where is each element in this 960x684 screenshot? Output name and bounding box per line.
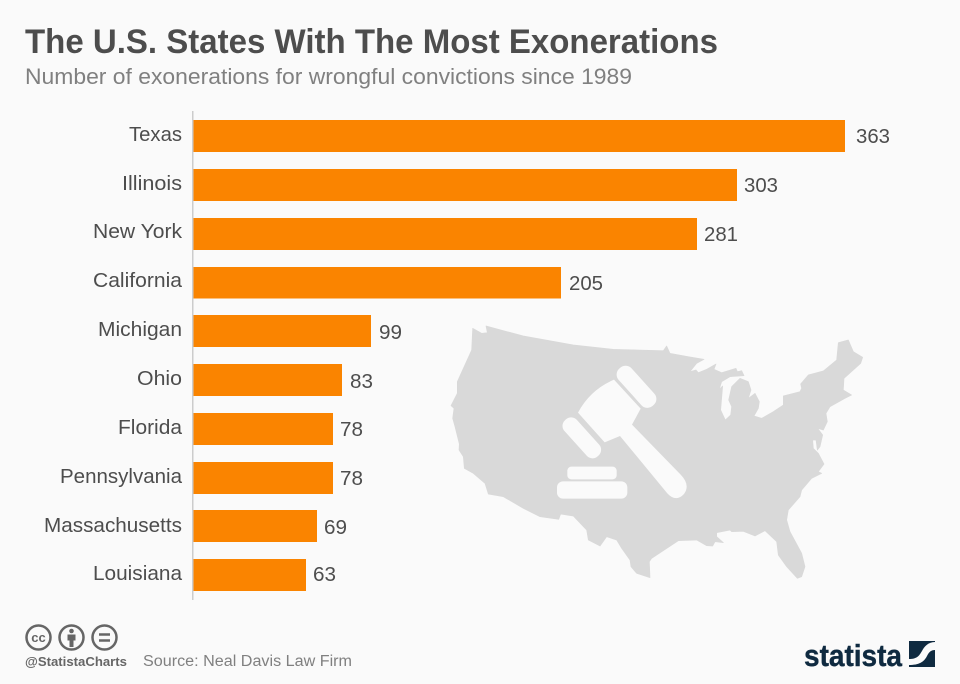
handle: @StatistaCharts: [25, 654, 127, 669]
row: Louisiana: 63: [313, 563, 336, 586]
row: Illinois: [122, 169, 778, 201]
row: Texas: Texas: [129, 123, 182, 146]
row: Florida: 78: [340, 418, 363, 441]
title: The U.S. States With The Most Exonerations: [25, 23, 718, 61]
logo wordmark: statista: [804, 638, 903, 673]
row: Florida: [118, 413, 363, 445]
row: Louisiana: Louisiana: [93, 562, 183, 585]
row: Louisiana: [93, 559, 336, 591]
statista logo: [804, 638, 935, 673]
creative commons icons: [26, 626, 116, 650]
icon: no derivatives: [92, 626, 116, 650]
icon: U.S. map: [451, 326, 863, 578]
row: Ohio: [137, 364, 373, 396]
row: Pennsylvania: [60, 462, 363, 494]
row: Massachusetts: Massachusetts: [44, 514, 182, 537]
row: Ohio: Ohio: [137, 367, 182, 390]
row: Illinois: Illinois: [122, 172, 182, 195]
icon: cc: cc: [31, 630, 46, 645]
row: Massachusetts: [44, 510, 347, 542]
logo mark: [909, 641, 935, 667]
row: Pennsylvania: 78: [340, 467, 363, 490]
bar chart: [44, 111, 890, 600]
map of the United States with gavel icon: [451, 326, 863, 578]
row: Michigan: [98, 315, 402, 347]
row: New York: New York: [93, 220, 183, 243]
axis line: [192, 111, 194, 600]
icon: gavel: [557, 362, 687, 499]
row: Texas: 363: [856, 125, 890, 148]
row: Florida: Florida: [118, 416, 183, 439]
row: Pennsylvania: Pennsylvania: [60, 465, 183, 488]
row: California: 205: [569, 272, 603, 295]
subtitle: Number of exonerations for wrongful convictions since 1989: [25, 64, 632, 89]
row: New York: [93, 218, 738, 250]
icon: attribution: [60, 626, 84, 650]
row: Michigan: Michigan: [98, 318, 182, 341]
row: Michigan: 99: [379, 321, 402, 344]
row: California: [93, 267, 603, 298]
row: California: California: [93, 269, 183, 292]
row: New York: 281: [704, 223, 738, 246]
source: Source: Neal Davis Law Firm: [143, 653, 352, 670]
row: Texas: [129, 120, 890, 152]
row: Illinois: 303: [744, 174, 778, 197]
row: Massachusetts: 69: [324, 516, 347, 539]
row: Ohio: 83: [350, 370, 373, 393]
